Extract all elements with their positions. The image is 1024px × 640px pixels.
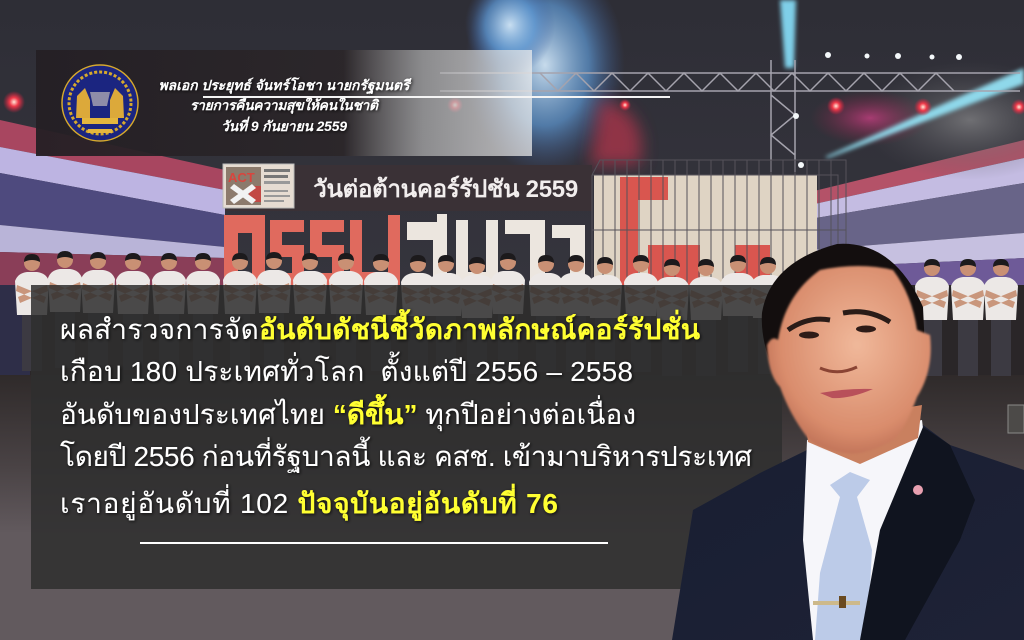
banner: anti-corruption day: [225, 165, 592, 211]
main statement text: โดยปี 2556 ก่อนที่รัฐบาลนี้ และ คสช. เข้ามาบริหารประเทศ: [60, 436, 752, 473]
portrait: man in suit: [672, 244, 1024, 640]
shirt collar: [803, 420, 925, 640]
lapel pin: [913, 485, 923, 495]
main statement text: เกือบ 180 ประเทศทั่วโลก ตั้งแต่ปี 2556 – 2558: [60, 351, 633, 387]
icon: ACT logo: ACT: [228, 170, 255, 185]
suit: [672, 425, 1024, 640]
main statement text: ผลสำรวจการจัดอันดับดัชนีชี้วัดภาพลักษณ์คอร์รัปชั่น: [60, 308, 700, 345]
nose: [820, 367, 857, 372]
header text: [158, 77, 412, 134]
hair: [762, 244, 925, 390]
stage letters: red and white blocks: [224, 214, 585, 285]
header text: พลเอก ประยุทธ์ จันทร์โอชา นายกรัฐมนตรี: [158, 77, 412, 95]
left wall stripes: [0, 120, 225, 190]
row of people on stage: [15, 251, 1018, 376]
main statement text: [60, 308, 752, 521]
mouth: [820, 389, 873, 398]
header text: วันที่ 9 กันยายน 2559: [221, 116, 347, 134]
panel: header strip: [36, 50, 532, 156]
right lapel: [860, 427, 975, 640]
header text: รายการคืนความสุขให้คนในชาติ: [190, 97, 380, 114]
brows: [788, 312, 890, 330]
cage with red letters: [592, 160, 846, 285]
tie: [815, 472, 872, 640]
right wall stripes: [810, 140, 1024, 205]
face: [767, 266, 931, 453]
panel: main text: [31, 285, 782, 589]
icon: government seal: [62, 65, 138, 141]
main statement text: อันดับของประเทศไทย “ดีขึ้น” ทุกปีอย่างต่อเนื่อง: [60, 393, 636, 432]
icon: ACT logo: [223, 164, 294, 208]
neck: [806, 405, 922, 464]
main statement text: เราอยู่อันดับที่ 102 ปัจจุบันอยู่อันดับที่ 76: [60, 483, 558, 521]
eyes: [799, 332, 819, 338]
banner title: วันต่อต้านคอร์รัปชัน 2559: [313, 175, 578, 203]
tie clip: [813, 596, 860, 608]
